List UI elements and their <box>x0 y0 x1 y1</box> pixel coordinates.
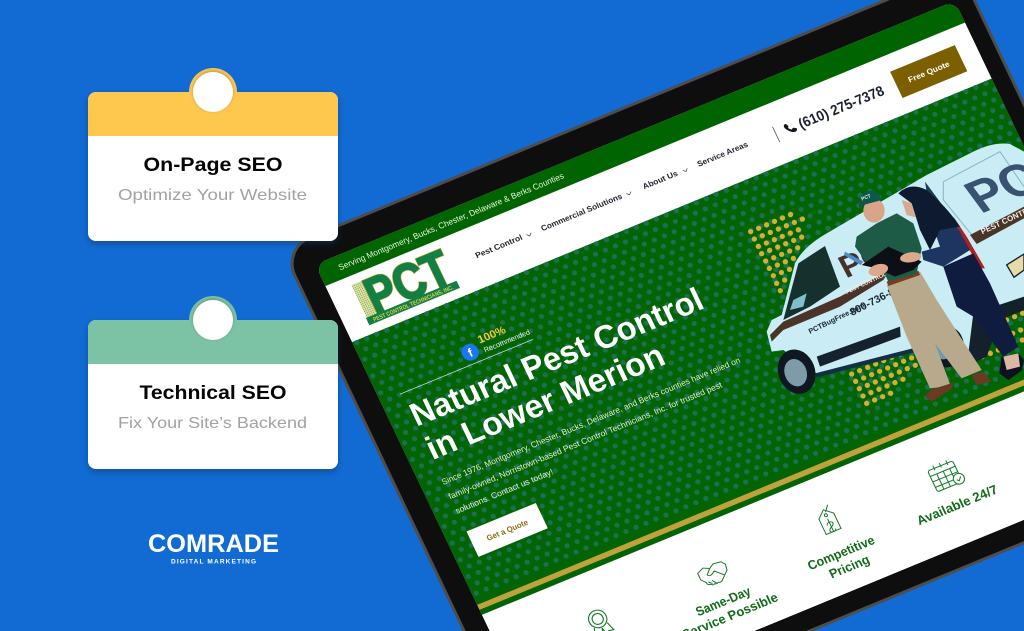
hero paragraph: family-owned, Norristown-based Pest Control Technicians, Inc. for trusted pest <box>447 380 724 501</box>
card: on-page SEO <box>88 68 338 241</box>
facebook recommendation badge: Recommended <box>482 328 531 354</box>
card subtitle: Fix Your Site’s Backend <box>118 415 307 432</box>
Comrade logo: COMRADE <box>148 530 279 558</box>
van body: PEST CONTROL <box>845 271 888 296</box>
icon: award ribbon <box>588 610 615 631</box>
label: available 24/7: Available 24/7 <box>914 482 1000 528</box>
technician <box>844 191 992 402</box>
card header <box>88 92 338 136</box>
card: technical SEO <box>88 296 338 469</box>
header ring <box>189 296 237 344</box>
top announcement bar: Serving Montgomery, Bucks, Chester, Delaware & Berks Counties <box>337 171 565 272</box>
tablet mockup <box>282 0 1024 631</box>
free quote button <box>890 45 967 98</box>
get a quote button: Get a Quote <box>485 518 530 543</box>
hero headline: Natural Pest Control <box>404 280 709 433</box>
Comrade logo: DIGITAL MARKETING <box>171 558 256 566</box>
navigation <box>474 140 750 260</box>
label: competitive pricing: Competitive <box>805 532 877 573</box>
van body <box>767 140 1024 399</box>
navigation: Pest Control <box>474 233 524 260</box>
hero headline: in Lower Merion <box>420 336 670 467</box>
van body: PC <box>832 235 892 284</box>
card title: Technical SEO <box>140 382 286 404</box>
navigation: About Us <box>641 169 680 191</box>
card header <box>88 320 338 364</box>
hero photo: technicians and van <box>751 140 1024 403</box>
PCT logo: PCT <box>355 240 460 324</box>
label: same-day service: Same-Day <box>693 583 754 619</box>
van body: PCTBugFree.com <box>807 301 867 336</box>
hero paragraph: solutions. Contact us today! <box>454 467 555 516</box>
header ring <box>189 68 237 116</box>
gold divider <box>477 380 1024 610</box>
navigation: Commercial Solutions <box>539 192 624 233</box>
top announcement bar <box>315 1 965 286</box>
customer <box>898 187 1024 380</box>
facebook recommendation badge: 100% <box>476 324 508 346</box>
card subtitle: Optimize Your Website <box>118 187 307 204</box>
hero background <box>352 78 1024 615</box>
PCT logo: PCT <box>355 240 460 324</box>
facebook recommendation badge: f <box>466 345 476 360</box>
icon: price tag <box>815 504 841 535</box>
free quote button: Free Quote <box>907 59 952 84</box>
technician: PCT <box>861 193 872 203</box>
facebook recommendation badge <box>400 326 534 394</box>
PCT logo: PEST CONTROL TECHNICIANS, INC. <box>373 285 455 323</box>
website screen <box>315 0 1024 631</box>
label: competitive pricing: Pricing <box>827 552 872 581</box>
gold halftone dots <box>751 214 1024 403</box>
van body: 800-736-82 <box>848 283 902 319</box>
icon: handshake <box>697 561 728 586</box>
hero paragraph: Since 1976, Montgomery, Chester, Bucks, Delaware, and Berks counties have relied on <box>440 355 742 487</box>
get a quote button <box>466 503 548 557</box>
tablet bezel <box>282 0 1024 631</box>
label: competitive pricing <box>808 538 874 578</box>
divider <box>772 127 780 142</box>
icon: calendar <box>928 460 965 492</box>
navigation: Service Areas <box>696 140 750 169</box>
card title: On-Page SEO <box>144 154 282 176</box>
phone number: (610) 275-7378 <box>796 83 887 133</box>
